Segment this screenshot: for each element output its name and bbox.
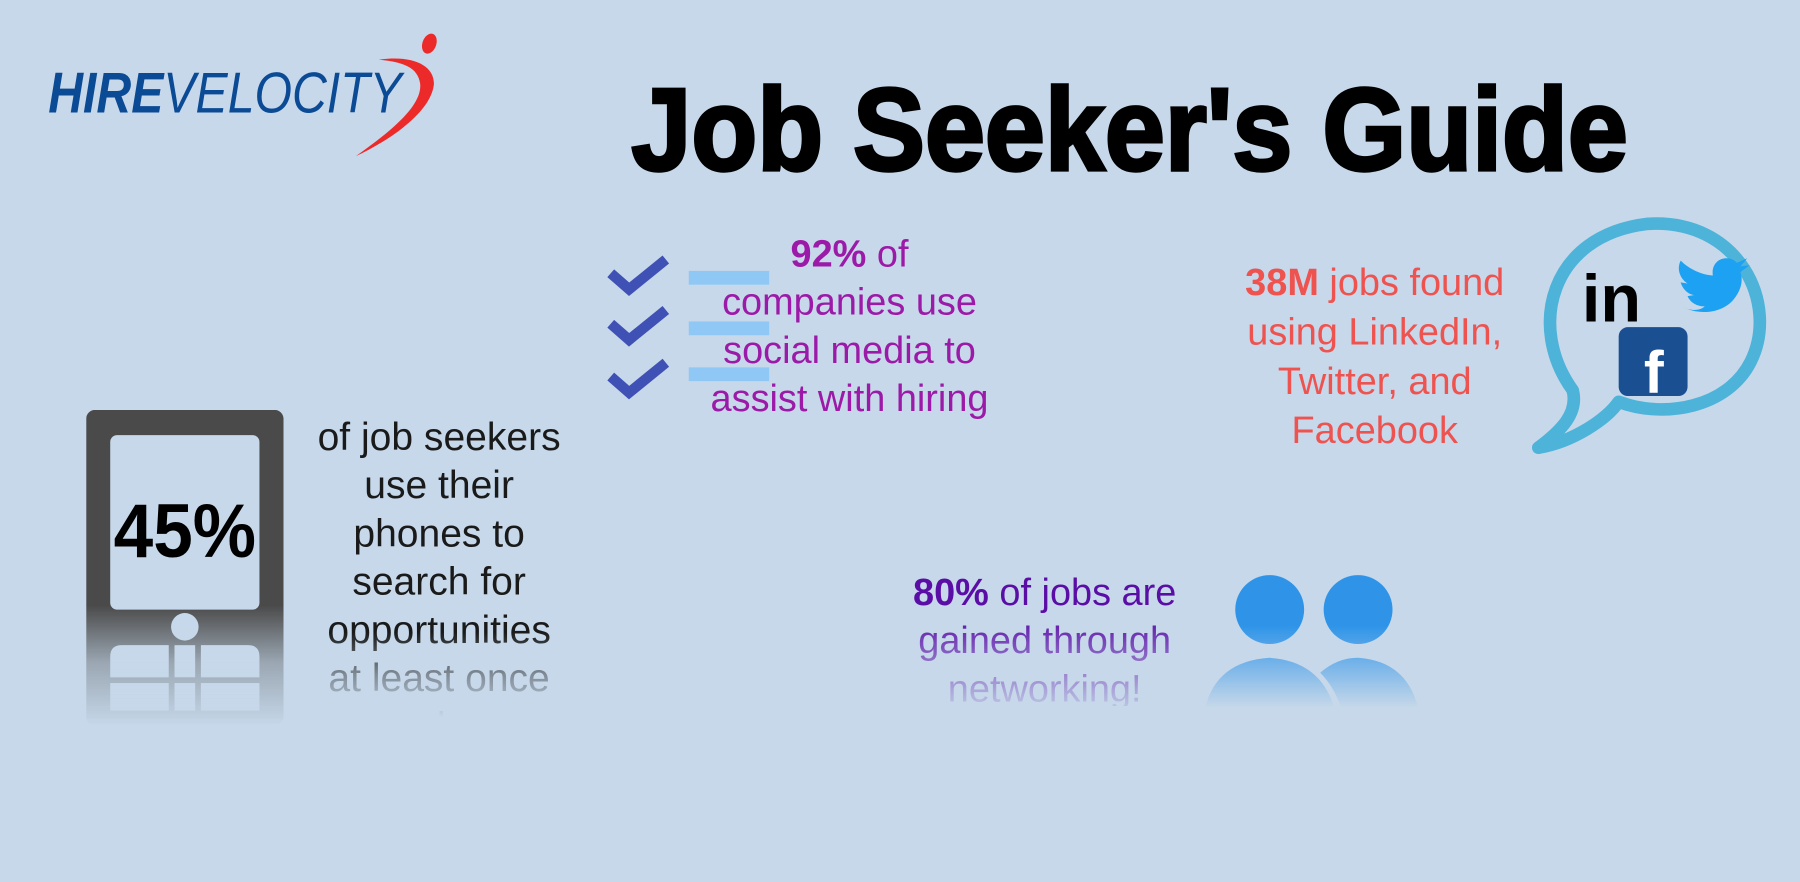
icon: people — [1207, 575, 1416, 703]
stat: phone search text: of job seekers — [318, 416, 561, 459]
stat: phone search text: search for — [352, 560, 526, 604]
icon: speech bubble with social logos: f — [1644, 339, 1664, 406]
icon: phone with 45% — [86, 410, 284, 716]
stat: 38M jobs — [1245, 261, 1504, 451]
stat: phone search text: phones to — [353, 512, 525, 556]
stat: 38M jobs: Facebook — [1292, 409, 1458, 451]
icon: phone with 45%: 45% — [114, 489, 256, 574]
stat: 80% networking: 80% of jobs are — [913, 571, 1176, 613]
icon: checklist — [607, 256, 770, 400]
icon: speech bubble with social logos — [1532, 217, 1766, 454]
stat: 38M jobs: 38M jobs found — [1245, 261, 1504, 303]
stat: 92% social media: 92% of — [791, 232, 908, 274]
stat: 38M jobs: Twitter, and — [1278, 359, 1472, 402]
stat: 80% networking — [914, 578, 1175, 706]
stat: 38M jobs: using LinkedIn, — [1247, 310, 1502, 352]
logo: HIREVELOCITY — [48, 62, 405, 126]
stat: phone search text: opportunities — [327, 608, 551, 652]
stat: 92% social media: companies use — [722, 280, 977, 323]
stat: phone search text: use their — [364, 464, 514, 507]
stat: phone search text: at least once — [328, 657, 550, 700]
logo — [48, 34, 437, 156]
icon: speech bubble with social logos: in — [1582, 262, 1641, 336]
stat: 80% networking: gained through — [918, 619, 1171, 661]
stat: phone search text — [319, 422, 560, 714]
stat: 92% social media — [711, 232, 988, 419]
stat: 92% social media: social media to — [723, 328, 976, 371]
stat: 92% social media: assist with hiring — [711, 377, 988, 419]
